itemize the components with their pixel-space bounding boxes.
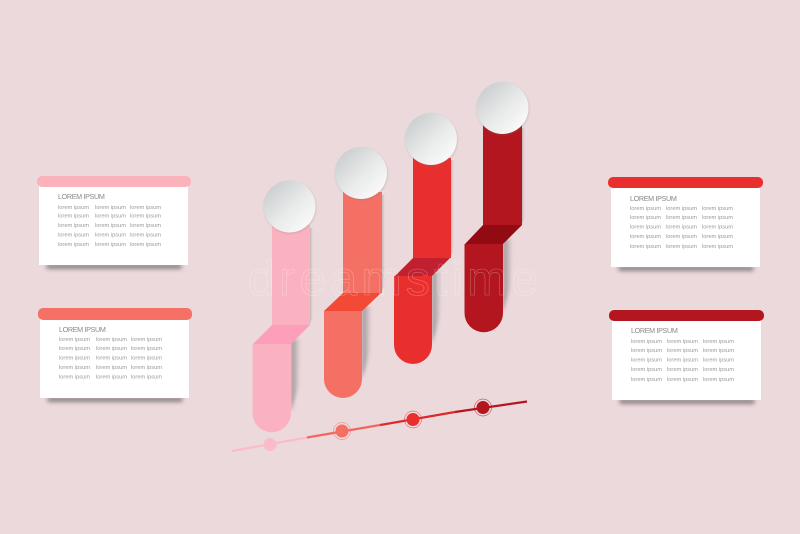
card text: lorem ipsum — [96, 346, 127, 352]
card text: lorem ipsum — [131, 337, 162, 343]
card text: lorem ipsum — [130, 232, 161, 238]
card shadow — [618, 266, 754, 271]
icon: disc 2 — [335, 147, 388, 200]
card text: lorem ipsum — [631, 348, 662, 354]
card body — [39, 185, 188, 265]
card shadow — [47, 397, 183, 402]
card header bar — [608, 177, 763, 188]
card text: lorem ipsum — [58, 232, 89, 238]
card text: lorem ipsum — [58, 205, 89, 211]
card text — [631, 326, 734, 383]
card shadow — [619, 399, 755, 404]
ribbon 3: red — [394, 158, 454, 364]
icon: disc 4 — [476, 82, 530, 136]
card text: lorem ipsum — [630, 244, 661, 250]
card text: lorem ipsum — [130, 223, 161, 229]
card text: lorem ipsum — [631, 367, 662, 373]
card text: lorem ipsum — [631, 339, 662, 345]
card text: lorem ipsum — [130, 242, 161, 248]
card text: lorem ipsum — [666, 206, 697, 212]
panel: bottom left card — [38, 308, 192, 402]
panel: bottom right card — [609, 310, 764, 404]
card text: lorem ipsum — [702, 224, 733, 230]
card text: lorem ipsum — [58, 223, 89, 229]
card body — [40, 318, 189, 398]
card text: lorem ipsum — [59, 365, 90, 371]
card text: lorem ipsum — [702, 206, 733, 212]
card text: lorem ipsum — [667, 377, 698, 383]
card text: lorem ipsum — [59, 337, 90, 343]
card text: lorem ipsum — [667, 348, 698, 354]
card text: lorem ipsum — [667, 367, 698, 373]
timeline marker 3 — [404, 411, 422, 428]
icon: disc 3 — [405, 113, 458, 166]
card text: lorem ipsum — [59, 346, 90, 352]
ribbon 2: salmon — [324, 192, 385, 398]
card text: lorem ipsum — [630, 224, 661, 230]
card text: LOREM IPSUM — [630, 194, 677, 203]
card text: lorem ipsum — [666, 234, 697, 240]
card text: lorem ipsum — [702, 215, 733, 221]
card text: lorem ipsum — [130, 205, 161, 211]
timeline marker 4 — [474, 399, 492, 416]
card text: lorem ipsum — [703, 339, 734, 345]
card text: lorem ipsum — [667, 339, 698, 345]
card text: lorem ipsum — [703, 377, 734, 383]
card text: lorem ipsum — [95, 223, 126, 229]
card text: lorem ipsum — [95, 232, 126, 238]
watermark: dreamstime — [248, 253, 538, 306]
card text: lorem ipsum — [630, 234, 661, 240]
card text: lorem ipsum — [58, 214, 89, 220]
ribbon 4: dark red — [464, 125, 525, 332]
card text: lorem ipsum — [703, 367, 734, 373]
card text — [58, 192, 161, 248]
timeline marker 1 — [264, 438, 276, 451]
card text: lorem ipsum — [631, 358, 662, 364]
card header bar — [609, 310, 764, 321]
card body — [611, 187, 760, 267]
card text: LOREM IPSUM — [59, 325, 106, 334]
card text — [630, 194, 733, 250]
card text: lorem ipsum — [95, 214, 126, 220]
card text: lorem ipsum — [667, 358, 698, 364]
timeline — [232, 399, 527, 451]
card text: lorem ipsum — [702, 244, 733, 250]
card text: lorem ipsum — [703, 348, 734, 354]
card text: lorem ipsum — [131, 374, 162, 380]
icon: disc 1 — [264, 180, 316, 234]
panel: top left card — [37, 176, 191, 269]
panel: top right card — [608, 177, 763, 271]
card header bar — [37, 176, 191, 187]
card text: lorem ipsum — [666, 224, 697, 230]
card text: lorem ipsum — [131, 346, 162, 352]
card text: lorem ipsum — [96, 356, 127, 362]
card text: lorem ipsum — [630, 215, 661, 221]
card text: lorem ipsum — [96, 374, 127, 380]
card text: lorem ipsum — [631, 377, 662, 383]
card shadow — [46, 264, 182, 269]
card text: LOREM IPSUM — [631, 326, 678, 335]
card text: lorem ipsum — [96, 337, 127, 343]
card text — [59, 325, 162, 380]
card text: lorem ipsum — [59, 356, 90, 362]
card body — [612, 320, 761, 400]
card header bar — [38, 308, 192, 320]
card text: lorem ipsum — [131, 356, 162, 362]
card text: lorem ipsum — [95, 242, 126, 248]
card text: lorem ipsum — [96, 365, 127, 371]
card text: lorem ipsum — [58, 242, 89, 248]
card text: lorem ipsum — [702, 234, 733, 240]
card text: lorem ipsum — [666, 215, 697, 221]
card text: lorem ipsum — [630, 206, 661, 212]
card text: LOREM IPSUM — [58, 192, 105, 201]
card text: lorem ipsum — [95, 205, 126, 211]
card text: lorem ipsum — [703, 358, 734, 364]
card text: lorem ipsum — [131, 365, 162, 371]
ribbon 1: light pink — [252, 225, 313, 432]
card text: lorem ipsum — [666, 244, 697, 250]
card text: lorem ipsum — [59, 374, 90, 380]
timeline marker 2 — [334, 422, 350, 440]
card text: lorem ipsum — [130, 214, 161, 220]
